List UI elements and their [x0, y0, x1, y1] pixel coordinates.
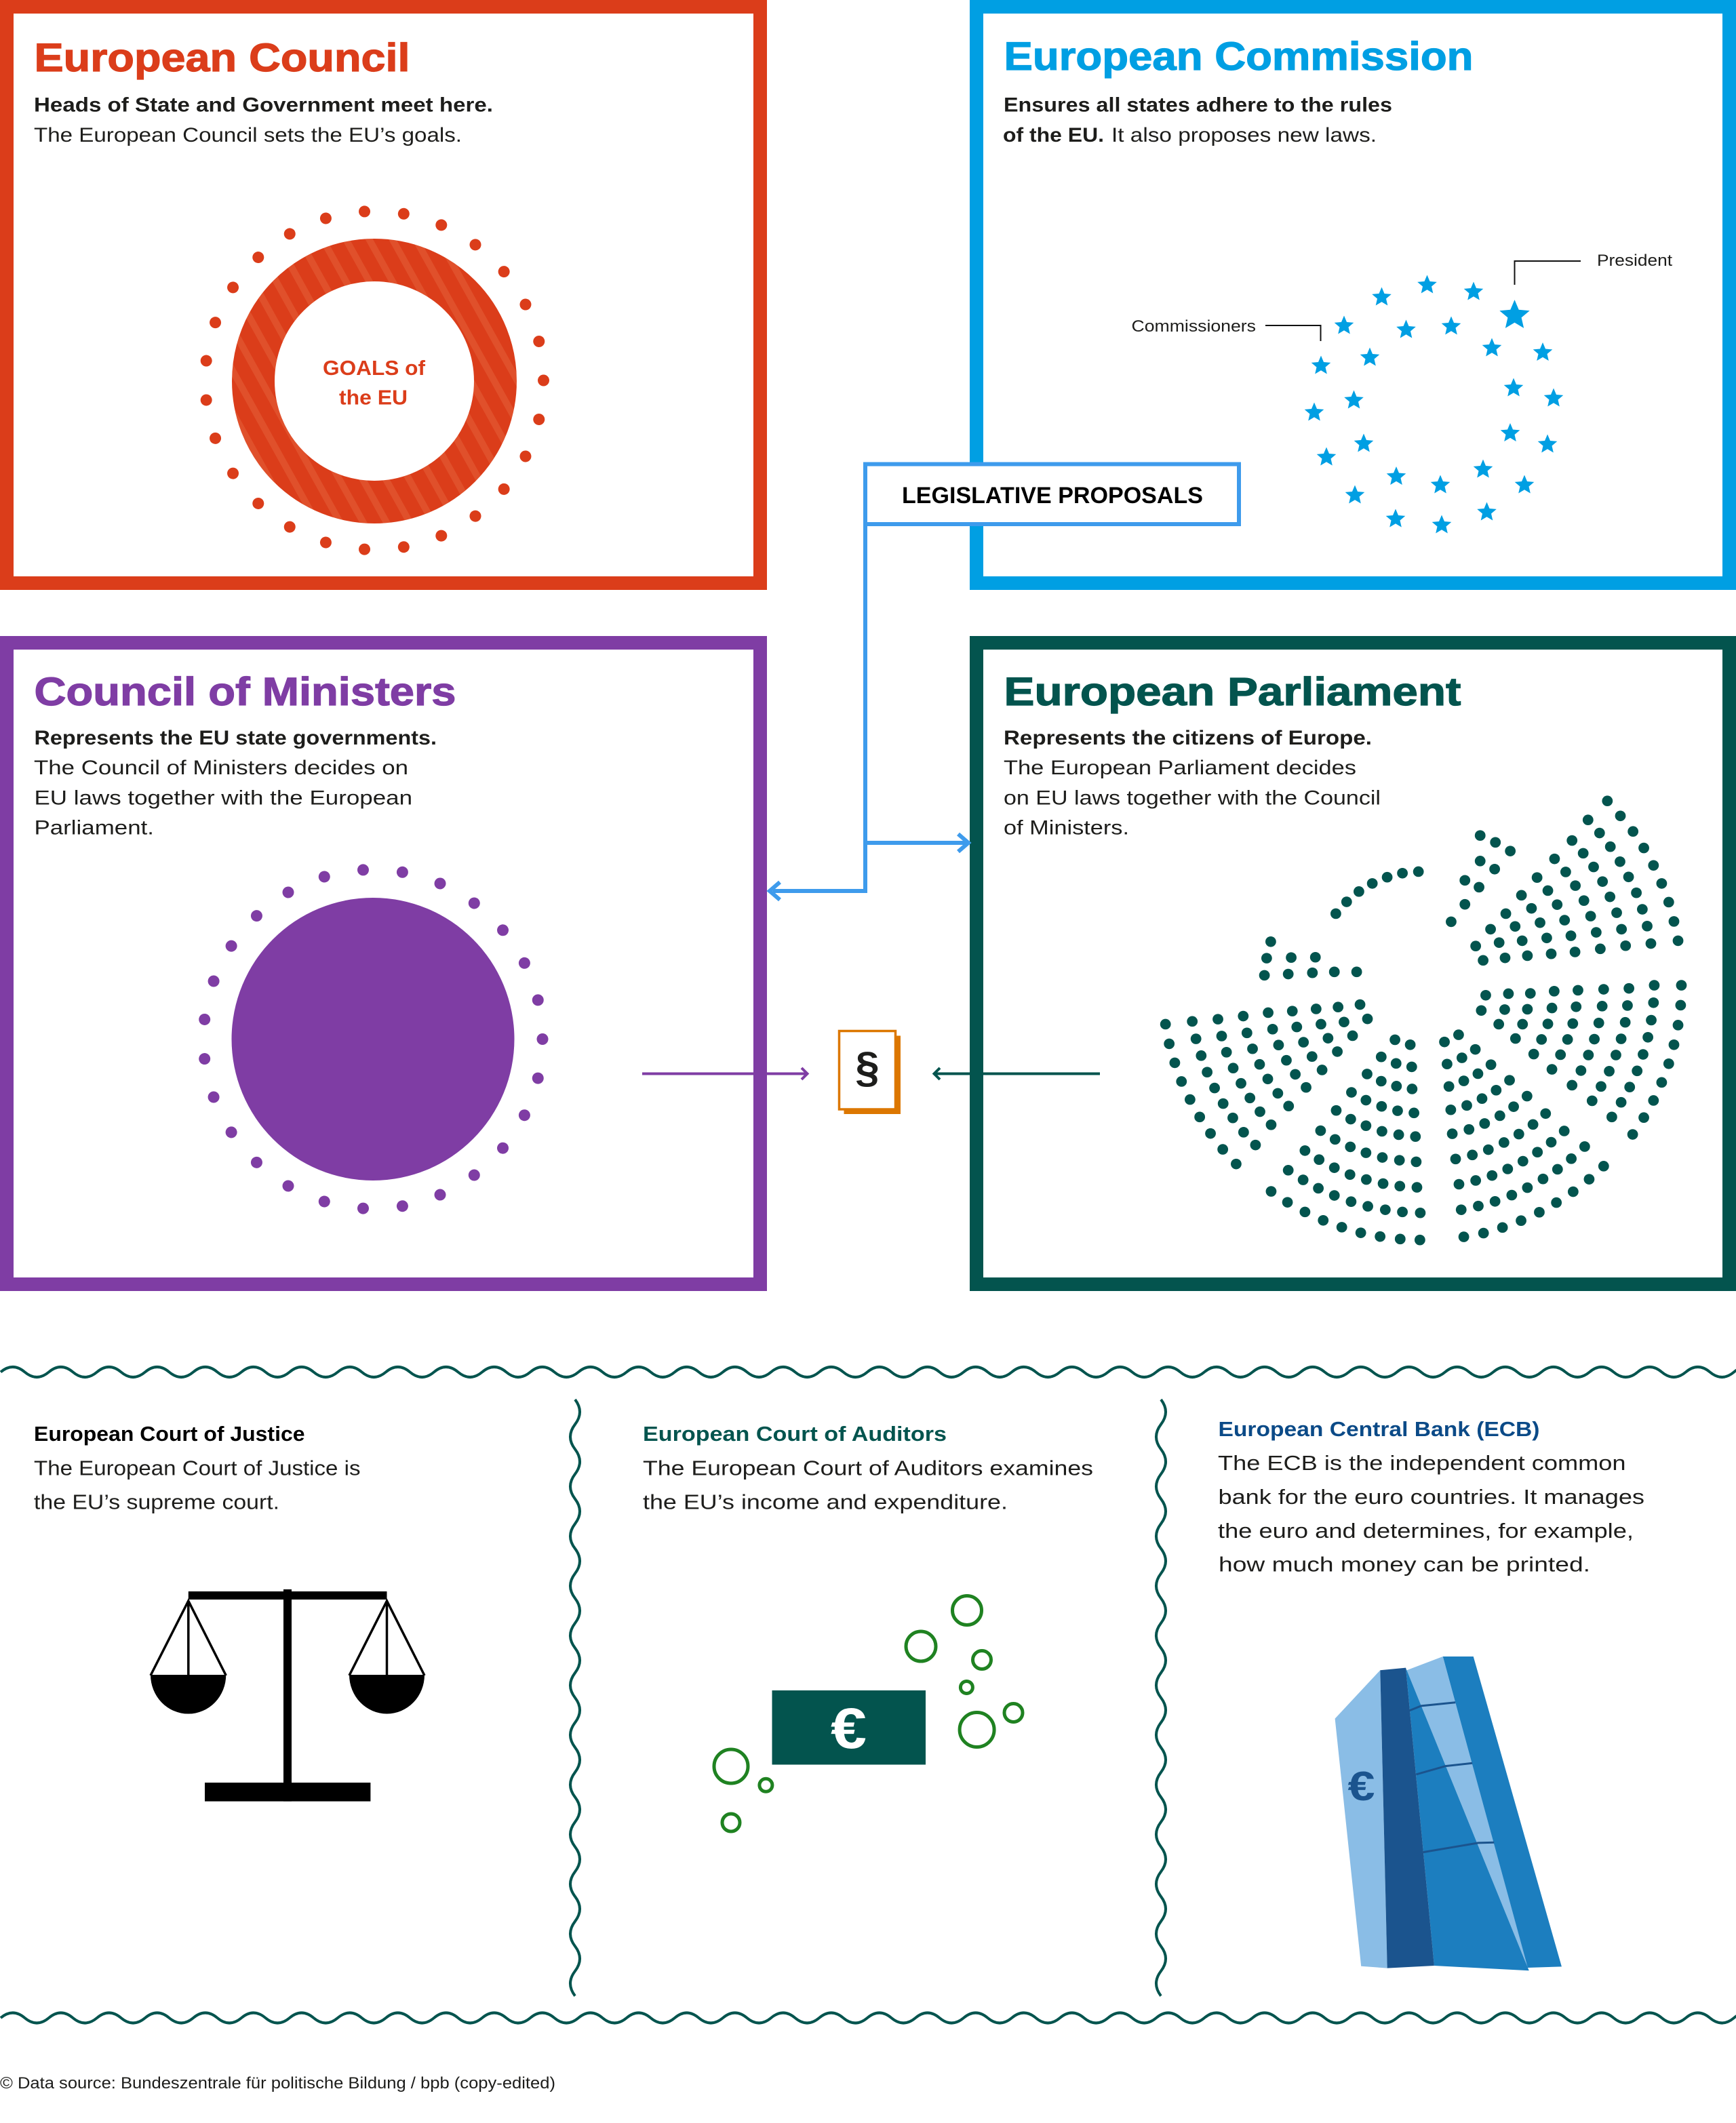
icon: green coin circles: [714, 1596, 1023, 1831]
text: ministers description: [34, 727, 437, 839]
text: parliament description: Represents the citizens of Europe.: [1004, 727, 1372, 749]
panel: European Central Bank: [1218, 1417, 1644, 1970]
icon: president star: [1499, 300, 1530, 328]
icon: euro banknote: €: [831, 1697, 867, 1760]
icon: law paragraph document: §: [855, 1043, 880, 1092]
text: commission description: [1003, 94, 1392, 146]
arrow: ministers to law: [642, 1068, 807, 1079]
source line: © Data source: Bundeszentrale für politische Bildung / bpb (copy-edited): [0, 2074, 555, 2092]
panel: European Council: [7, 7, 760, 583]
icon: ring of 27 dots: [198, 864, 549, 1214]
heading: European Council: European Council: [34, 36, 410, 80]
heading: Council of Ministers: Council of Ministers: [34, 670, 456, 714]
text: court of auditors: the EU’s income and expenditure.: [643, 1490, 1008, 1513]
text: council description: [34, 94, 493, 146]
text: parliament description: [1004, 727, 1381, 839]
text: ministers description: Parliament.: [34, 816, 154, 839]
chart: parliament seats: [1160, 795, 1686, 1246]
text: commission description: It also proposes new laws.: [1111, 124, 1377, 146]
text: central bank: how much money can be printed.: [1219, 1553, 1590, 1576]
text: court of auditors: European Court of Auditors: [643, 1422, 947, 1446]
arrow: legislative proposals connector: [770, 526, 968, 900]
icon: euro banknote: [772, 1690, 926, 1764]
divider: vertical wave left: [570, 1400, 580, 1996]
divider: bottom wave: [1, 2012, 1736, 2023]
callout: commissioners: [1131, 317, 1321, 341]
text: ministers description: EU laws together with the European: [34, 787, 412, 810]
label: goals of the EU: the EU: [339, 385, 408, 410]
text: council description: The European Council sets the EU’s goals.: [34, 124, 462, 146]
panel: European Court of Auditors: [643, 1422, 1093, 1831]
callout: president: President: [1597, 252, 1672, 270]
text: court of justice: The European Court of Justice is: [34, 1456, 361, 1480]
text: court of justice: European Court of Justice: [34, 1422, 305, 1446]
icon: ring of 27 dots: [200, 205, 549, 555]
text: court of auditors: [643, 1422, 1093, 1513]
text: central bank: European Central Bank (ECB): [1218, 1417, 1539, 1441]
icon: ECB tower: €: [1348, 1764, 1375, 1809]
chart: striped goals ring: [254, 260, 495, 502]
text: commission description: of the EU.: [1003, 124, 1104, 146]
text: parliament description: of Ministers.: [1004, 816, 1129, 839]
callout: commissioners: Commissioners: [1131, 317, 1256, 336]
arrow: parliament to law: [934, 1068, 1100, 1079]
label: goals of the EU: GOALS of: [323, 356, 426, 380]
icon: law paragraph document: [840, 1031, 901, 1114]
text: court of justice: the EU’s supreme court.: [34, 1490, 279, 1513]
callout: president: [1515, 252, 1672, 285]
text: central bank: [1218, 1417, 1644, 1576]
label: legislative proposals: [865, 464, 1239, 524]
text: ministers description: The Council of Ministers decides on: [34, 757, 408, 779]
label: goals of the EU: [323, 356, 426, 410]
divider: vertical wave right: [1156, 1400, 1166, 1996]
text: court of justice: [34, 1422, 361, 1513]
heading: European Parliament: European Parliament: [1004, 670, 1461, 714]
text: ministers description: Represents the EU state governments.: [34, 727, 437, 749]
icon: scales of justice: [151, 1589, 425, 1802]
label: legislative proposals: LEGISLATIVE PROPOSALS: [902, 483, 1203, 509]
icon: ECB tower: [1335, 1656, 1562, 1970]
text: court of auditors: The European Court of Auditors examines: [643, 1456, 1093, 1480]
panel: Council of Ministers: [7, 643, 760, 1284]
heading: European Commission: European Commission: [1004, 35, 1473, 79]
text: central bank: bank for the euro countries. It manages: [1218, 1485, 1644, 1509]
text: parliament description: The European Parliament decides: [1004, 757, 1356, 779]
panel: European Commission: [976, 7, 1729, 583]
text: parliament description: on EU laws together with the Council: [1004, 787, 1381, 810]
text: central bank: The ECB is the independent common: [1218, 1451, 1626, 1475]
panel: European Parliament: [976, 643, 1729, 1284]
chart: solid purple circle: [232, 898, 514, 1180]
text: commission description: Ensures all states adhere to the rules: [1004, 94, 1392, 117]
divider: top wave: [1, 1367, 1736, 1377]
text: council description: Heads of State and Government meet here.: [34, 94, 493, 117]
icon: commissioner stars: [1305, 275, 1563, 533]
text: central bank: the euro and determines, for example,: [1218, 1519, 1634, 1543]
panel: European Court of Justice: [34, 1422, 425, 1802]
